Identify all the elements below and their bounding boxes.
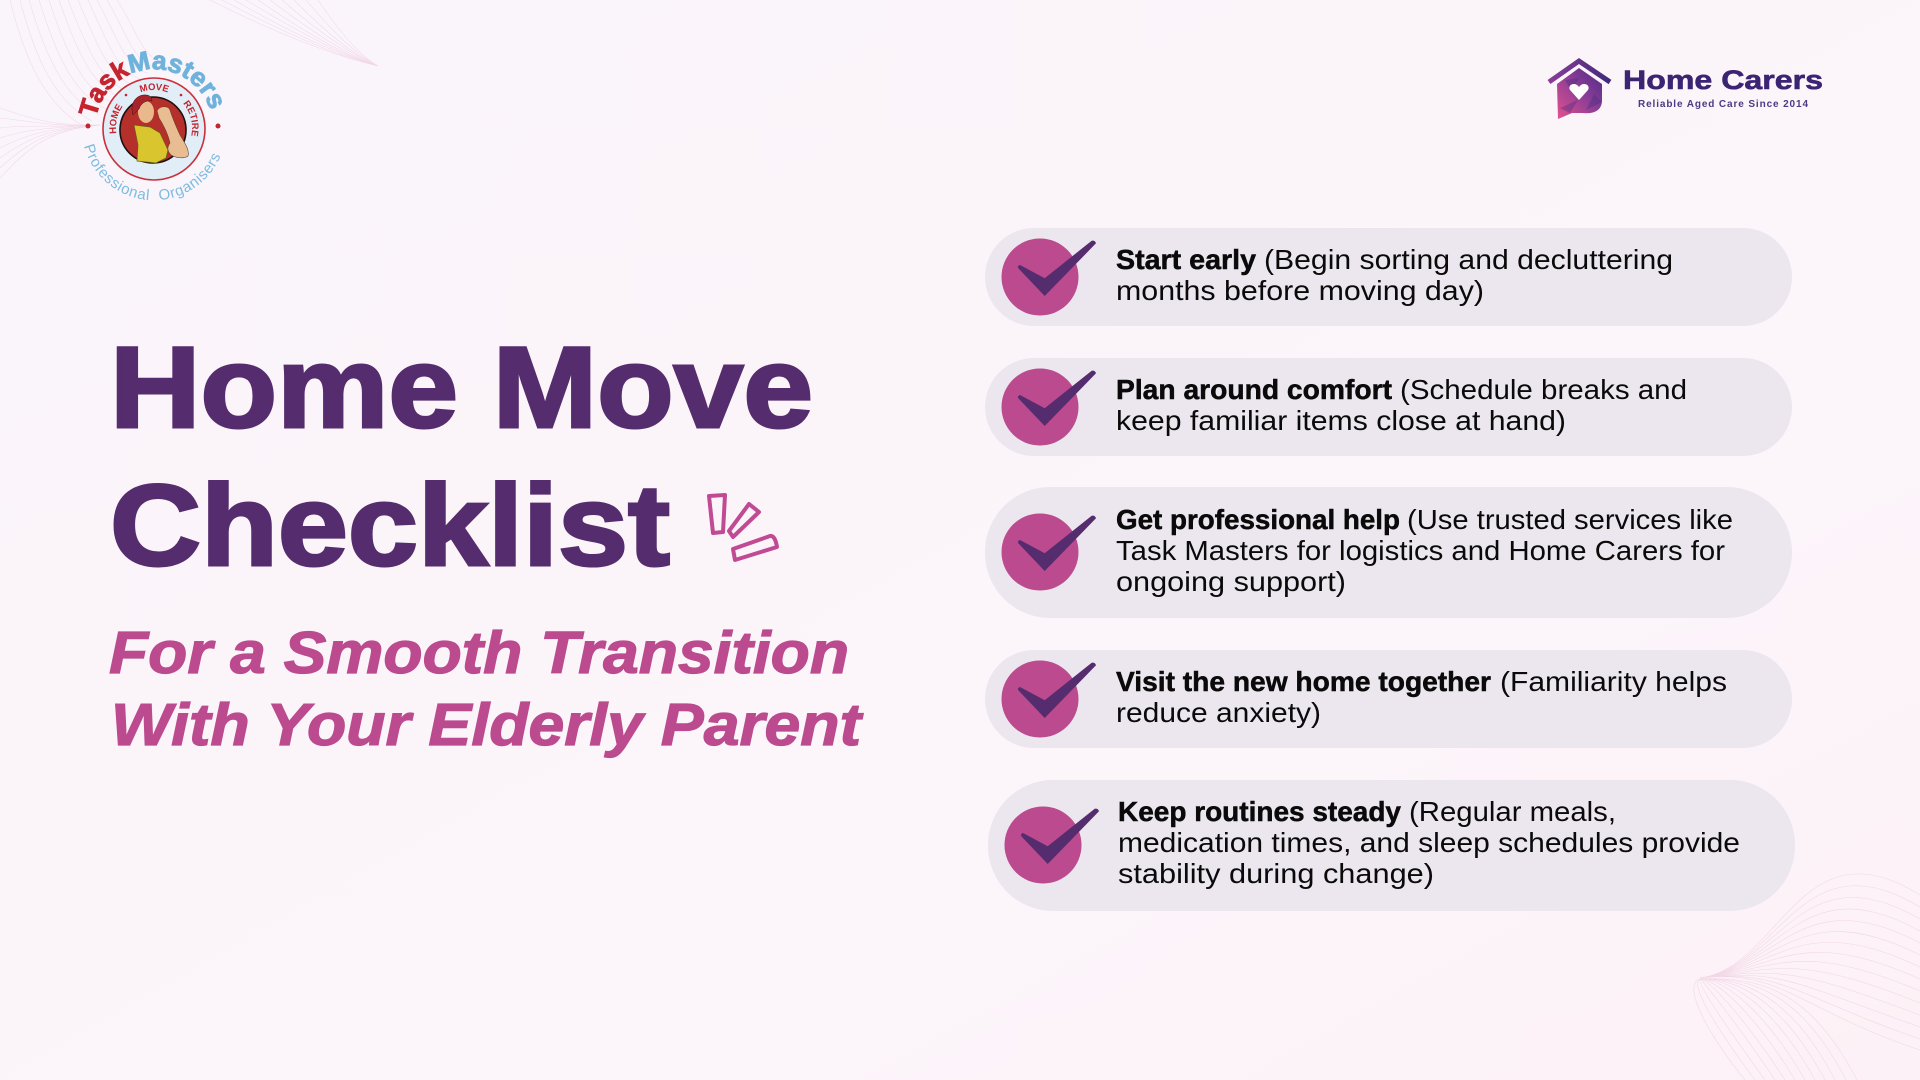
- text: item 1: (Begin sorting and decluttering: [1264, 244, 1673, 275]
- icon: check 1: [1002, 238, 1096, 316]
- tagline: Reliable Aged Care Since 2014: [1638, 99, 1808, 110]
- panel: checklist item 1: [985, 228, 1792, 326]
- text: item 4: [1116, 666, 1727, 728]
- text: item 3: Get professional help: [1116, 504, 1400, 535]
- title: Checklist: [110, 462, 670, 590]
- text: item 1: [1116, 244, 1673, 306]
- logo arc text: TaskMasters: TaskMasters: [78, 50, 222, 114]
- text: item 2: (Schedule breaks and: [1400, 374, 1687, 405]
- text: item 1: months before moving day): [1116, 275, 1484, 306]
- text: item 4: Visit the new home together: [1116, 666, 1491, 697]
- text: item 2: [1116, 374, 1687, 436]
- icon: sparkle accent: [709, 495, 777, 560]
- text: item 4: (Familiarity helps: [1500, 666, 1727, 697]
- logo badge: MOVE: [140, 83, 170, 92]
- panel: checklist item 4: [985, 650, 1792, 748]
- text: item 3: ongoing support): [1116, 566, 1346, 597]
- icon: house speech bubble: [1549, 61, 1610, 119]
- subtitle: [109, 620, 864, 758]
- text: item 2: keep familiar items close at hand): [1116, 405, 1566, 436]
- text: item 3: Task Masters for logistics and Home Carers for: [1116, 535, 1725, 566]
- text: item 2: Plan around comfort: [1116, 374, 1392, 405]
- logo badge: HOME: [109, 104, 122, 134]
- icon: check 5: [1004, 806, 1099, 884]
- subtitle: With Your Elderly Parent: [111, 692, 864, 758]
- text: item 4: reduce anxiety): [1116, 697, 1321, 728]
- logo arc text: Professional Organisers: Professional Organisers: [84, 144, 220, 200]
- title: Home Move: [110, 324, 813, 452]
- logo badge: [102, 77, 206, 181]
- text: item 5: [1118, 796, 1740, 889]
- text: item 5: (Regular meals,: [1409, 796, 1616, 827]
- logo badge: RETIRE: [183, 100, 199, 136]
- subtitle: For a Smooth Transition: [109, 620, 849, 686]
- wordmark: Home Carers: [1623, 65, 1823, 95]
- panel: checklist item 3: [985, 487, 1792, 618]
- logo: Home Carers: [1549, 61, 1823, 119]
- text: item 1: Start early: [1116, 244, 1256, 275]
- panel: checklist item 5: [988, 780, 1795, 911]
- icon: check 4: [1002, 660, 1096, 738]
- icon: check 2: [1002, 368, 1096, 446]
- text: item 5: medication times, and sleep schedules provide: [1118, 827, 1740, 858]
- text: item 3: (Use trusted services like: [1407, 504, 1733, 535]
- text: item 5: Keep routines steady: [1118, 796, 1401, 827]
- logo: Task Masters: [78, 50, 222, 200]
- panel: checklist item 2: [985, 358, 1792, 456]
- text: item 5: stability during change): [1118, 858, 1434, 889]
- icon: check 3: [1002, 514, 1096, 590]
- title: [110, 324, 813, 590]
- text: item 3: [1116, 504, 1733, 597]
